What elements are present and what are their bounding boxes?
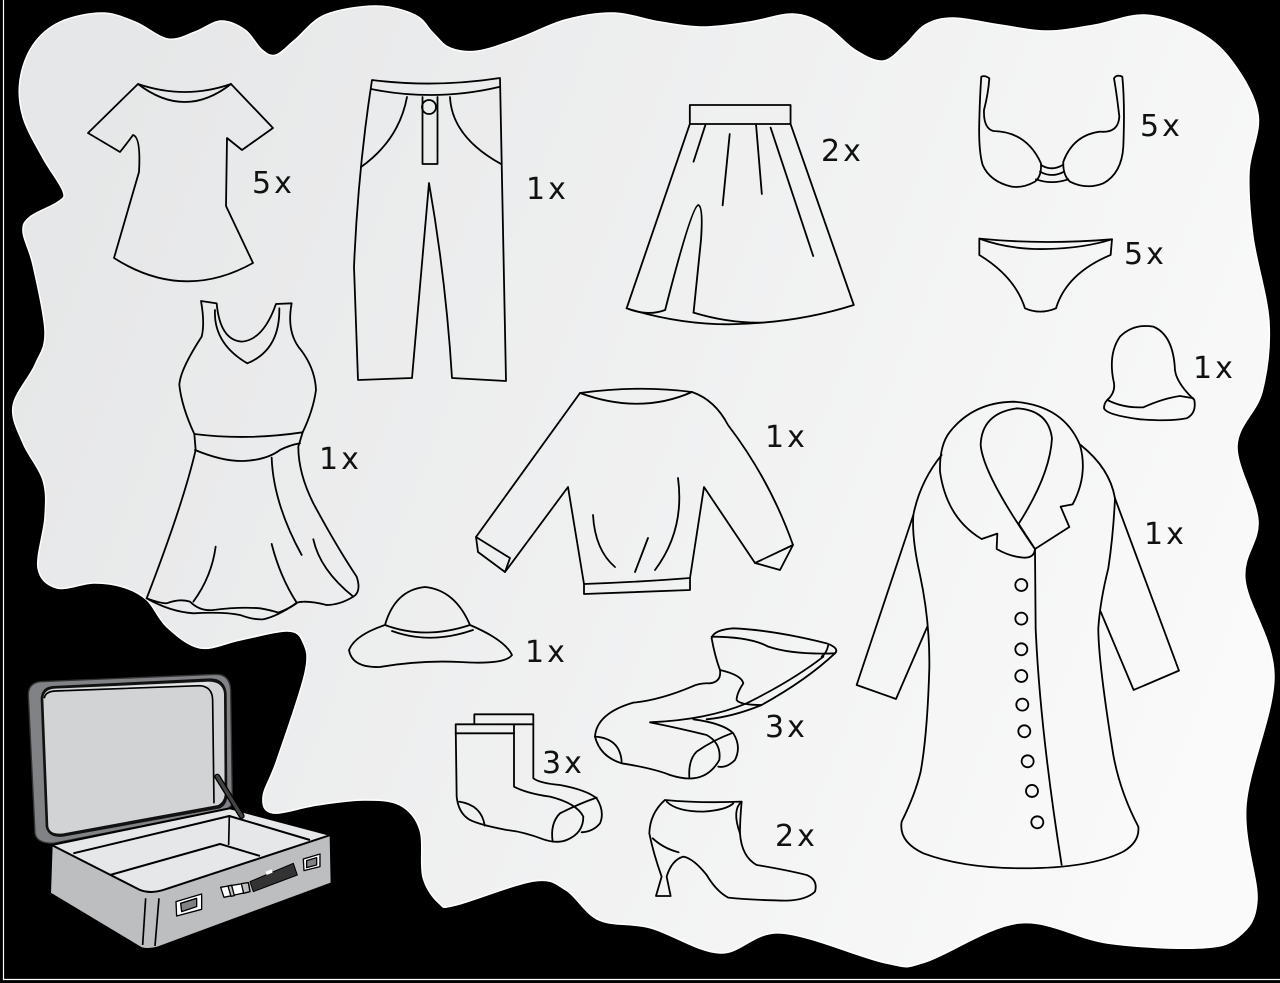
suitcase handle [250,863,297,892]
suitcase buckle [221,883,250,897]
icon: dress [147,301,359,619]
label: briefs count: 5x [1124,237,1167,272]
icon: skirt [627,105,854,324]
suitcase interior [52,808,331,892]
label: shoe count: 2x [775,819,818,854]
label: beanie count: 1x [1193,351,1236,386]
suitcase lid lining [43,682,225,834]
suitcase lid [28,674,232,843]
icon: short socks [456,714,602,842]
suitcase body [50,808,332,949]
icon: heeled shoe [649,800,816,901]
suitcase lid rim [41,678,227,837]
label: skirt count: 2x [821,134,864,169]
suitcase strut [217,777,242,816]
suitcase right latch [303,854,320,871]
label: bra count: 5x [1140,109,1183,144]
icon: open suitcase [28,674,332,949]
label: trousers count: 1x [526,172,569,207]
icon: beanie [1104,326,1195,420]
label: t-shirt count: 5x [252,166,295,201]
label: long socks count: 3x [765,710,808,745]
label: sweater count: 1x [765,420,808,455]
icon: coat [857,402,1179,868]
label: hat count: 1x [525,635,568,670]
icon: briefs [979,239,1112,312]
label: coat count: 1x [1144,517,1187,552]
icon: sweater [476,389,793,594]
icon: bra [979,76,1124,187]
suitcase left latch [176,894,202,916]
label: dress count: 1x [319,442,362,477]
icon: trousers [354,78,506,381]
icon: wide-brim hat [349,587,512,667]
label: short socks count: 3x [542,746,585,781]
icon: long socks [595,628,836,779]
icon: t-shirt [88,84,273,281]
